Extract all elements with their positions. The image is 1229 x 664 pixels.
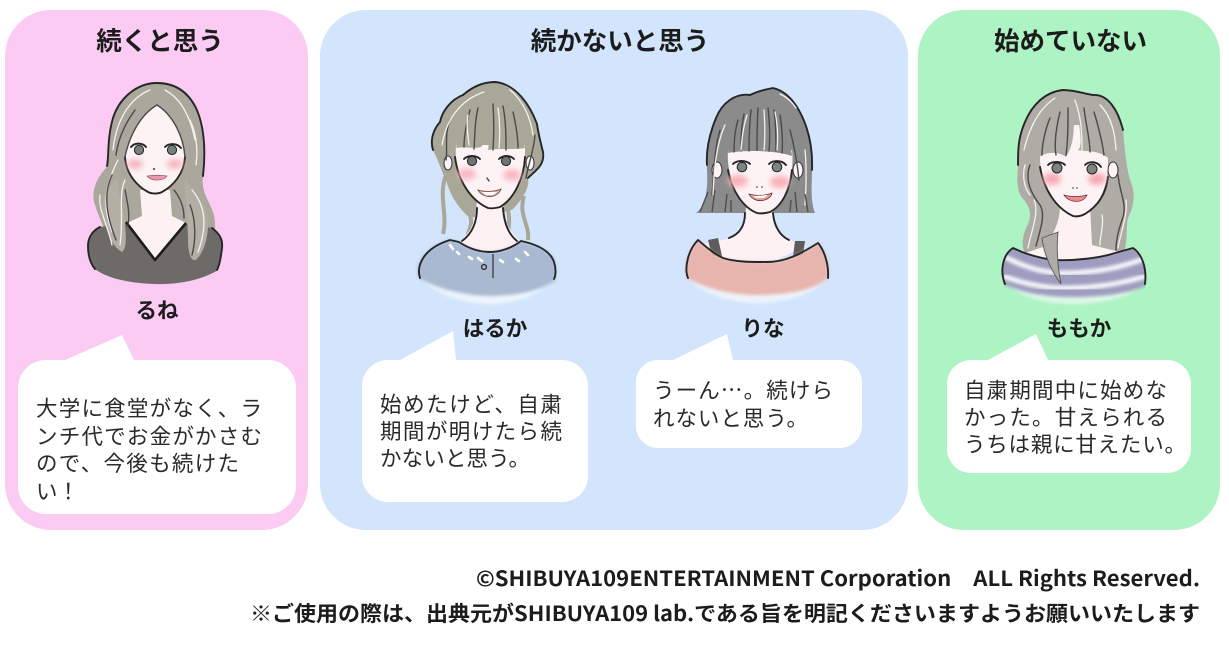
speech bubble: ももか: うちは親に甘えたい。 [964, 428, 1186, 459]
speech bubble: ももか [947, 334, 1191, 473]
speech bubble: りな: うーん…。続けら [653, 374, 833, 405]
illustration: るね [88, 83, 222, 284]
speech bubble: はるか: かないと思う。 [380, 442, 530, 473]
speech bubble: りな: れないと思う。 [653, 402, 808, 433]
footer: source note: ※ご使用の際は、出典元がSHIBUYA109 lab.である旨を明記くださいますようお願いいたします [250, 598, 1200, 628]
speech bubble: はるか [362, 331, 588, 502]
speech bubble: るね: ので、今後も続けた [36, 447, 239, 478]
heading: 続くと思う: 続くと思う [96, 21, 224, 58]
panel: 始めていない [918, 10, 1220, 530]
speech bubble: はるか: 期間が明けたら続 [380, 415, 562, 446]
speech bubble: ももか: かった。甘えられる [964, 401, 1167, 432]
illustration: りな [686, 88, 829, 303]
speech bubble: はるか: 始めたけど、自粛 [380, 388, 562, 419]
speech bubble: りな [636, 334, 862, 448]
name: はるか: はるか [463, 312, 528, 343]
speech bubble: るね: い！ [36, 475, 79, 506]
name: ももか: ももか [1047, 312, 1112, 343]
illustration: ももか [995, 90, 1150, 304]
speech bubble: るね [18, 335, 296, 514]
name: りな: りな [741, 312, 785, 343]
heading: 始めていない: 始めていない [994, 21, 1147, 58]
name: るね: るね [135, 294, 179, 325]
panel: 続くと思う [5, 10, 308, 530]
footer: copyright: ©SHIBUYA109ENTERTAINMENT Corporation ALL Rights Reserved. [476, 563, 1200, 593]
speech bubble: るね: 大学に食堂がなく、ラ [36, 392, 262, 423]
speech bubble: ももか: 自粛期間中に始めな [964, 374, 1167, 405]
speech bubble: るね: ンチ代でお金がかさむ [36, 420, 262, 451]
heading: 続かないと思う: 続かないと思う [531, 21, 709, 58]
illustration: はるか [418, 82, 556, 304]
